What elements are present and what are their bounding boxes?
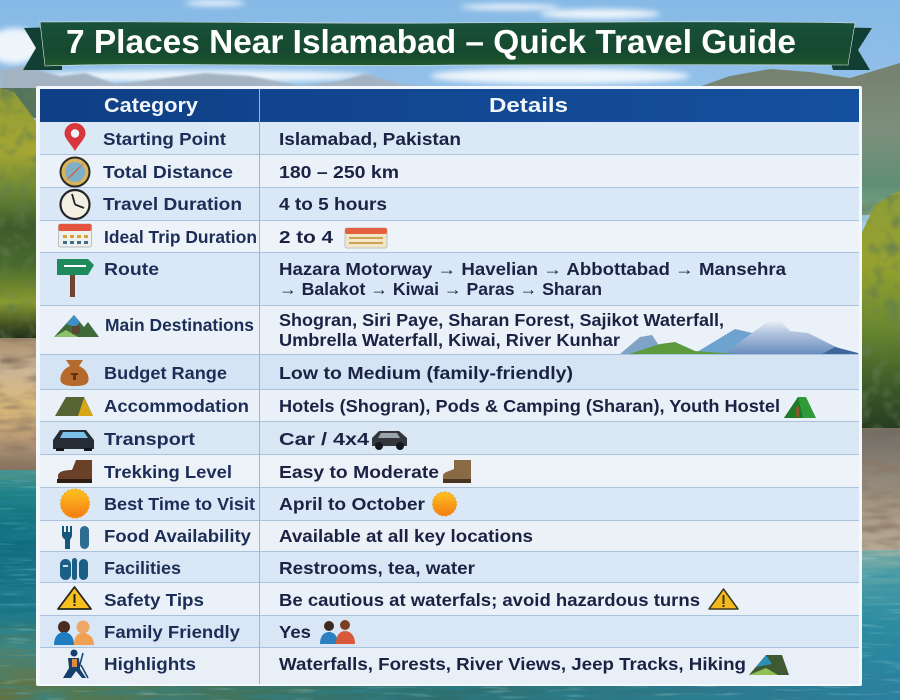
- row: family friendly: [54, 620, 355, 645]
- icon: boot: [57, 460, 92, 483]
- row: accommodation: [55, 396, 816, 418]
- row: budget range: Low to Medium (family-friendly): [279, 363, 573, 383]
- row: transport: Transport: [104, 429, 195, 449]
- row: transport: Car / 4x4: [279, 429, 369, 449]
- table header: Details: [489, 95, 568, 117]
- left trees: [0, 88, 38, 340]
- row: transport: [53, 429, 407, 451]
- row: main destinations: [54, 310, 858, 354]
- row: family friendly: Yes: [279, 622, 311, 642]
- row: budget range: [60, 360, 573, 386]
- icon: route signpost: [57, 259, 94, 297]
- destinations text: [279, 310, 724, 350]
- title: 7 Places Near Islamabad – Quick Travel Guide: [66, 23, 796, 60]
- right trees: [862, 190, 900, 435]
- icon: calendar: [58, 224, 92, 247]
- row: total distance: [60, 158, 399, 186]
- row: highlights: Highlights: [104, 654, 196, 674]
- row: highlights: Waterfalls, Forests, River Views, Jeep Tracks, Hiking: [279, 654, 746, 674]
- illustration: mountain panorama: [620, 318, 858, 354]
- row: accommodation: Accommodation: [104, 396, 249, 416]
- row: route: Route: [104, 259, 159, 279]
- row: food availability: Available at all key locations: [279, 526, 533, 546]
- icon: fork and knife: [62, 526, 89, 549]
- destinations text: Shogran, Siri Paye, Sharan Forest, Sajikot Waterfall,: [279, 310, 724, 330]
- row: budget range: Budget Range: [104, 363, 227, 383]
- row: route: [57, 259, 786, 299]
- icon: 4x4 vehicle: [372, 431, 407, 450]
- row: highlights: [63, 650, 789, 678]
- icon: small sun: [432, 492, 456, 516]
- title banner: [23, 22, 872, 70]
- row: facilities: Restrooms, tea, water: [279, 558, 475, 578]
- banner right ribbon tail: [820, 27, 872, 70]
- row: travel duration: 4 to 5 hours: [279, 194, 387, 214]
- row: safety tips: [58, 587, 738, 610]
- left rocks: [0, 338, 38, 473]
- icon: facilities symbols: [60, 558, 88, 580]
- icon: small calendar: [345, 228, 387, 248]
- row: food availability: [62, 526, 533, 549]
- icon: compass: [60, 158, 90, 186]
- table panel: [36, 86, 862, 686]
- icon: tent: [55, 397, 93, 416]
- row: best time to visit: April to October: [279, 494, 425, 514]
- row: total distance: 180 – 250 km: [279, 162, 399, 182]
- banner left ribbon tail: [23, 27, 62, 70]
- row: facilities: [60, 558, 475, 580]
- icon: green tent: [784, 397, 816, 418]
- banner body: [40, 22, 855, 66]
- icon: hiker: [63, 650, 88, 678]
- icon: mountain landscape: [54, 315, 99, 337]
- destinations text: Umbrella Waterfall, Kiwai, River Kunhar: [279, 330, 620, 350]
- icon: small boot: [443, 460, 471, 483]
- row: starting point: Starting Point: [103, 129, 226, 149]
- row: ideal trip duration: 2 to 4: [279, 227, 333, 247]
- icon: car: [53, 430, 94, 451]
- row: travel duration: Travel Duration: [103, 194, 242, 214]
- table header: Category: [104, 95, 199, 117]
- row: starting point: [64, 123, 461, 151]
- route details text: → Balakot → Kiwai → Paras → Sharan: [279, 279, 602, 299]
- row: accommodation: Hotels (Shogran), Pods & Camping (Sharan), Youth Hostel: [279, 396, 780, 416]
- row: starting point: Islamabad, Pakistan: [279, 129, 461, 149]
- icon: warning triangle: [58, 587, 91, 609]
- row: best time to visit: [60, 489, 456, 518]
- icon: clock: [60, 190, 90, 219]
- icon: small warning triangle: [709, 589, 738, 609]
- icon: small family: [320, 620, 355, 644]
- table header: [40, 89, 859, 122]
- row: ideal trip duration: [58, 224, 387, 248]
- row: total distance: Total Distance: [103, 162, 233, 182]
- icon: location pin: [64, 123, 86, 151]
- row: travel duration: [60, 190, 387, 219]
- row: trekking level: [57, 460, 471, 483]
- water: [0, 686, 900, 700]
- route details text: Hazara Motorway → Havelian → Abbottabad → Mansehra: [279, 259, 786, 279]
- row: safety tips: Safety Tips: [104, 590, 204, 610]
- row: trekking level: Trekking Level: [104, 462, 232, 482]
- row: best time to visit: Best Time to Visit: [104, 494, 255, 514]
- row: food availability: Food Availability: [104, 526, 251, 546]
- route details text: [279, 259, 786, 299]
- row: ideal trip duration: Ideal Trip Duration: [104, 227, 257, 247]
- row: facilities: Facilities: [104, 558, 181, 578]
- icon: hiking trail mountains: [749, 655, 789, 675]
- icon: money bag: [60, 360, 89, 386]
- row: safety tips: Be cautious at waterfals; avoid hazardous turns: [279, 590, 700, 610]
- row: trekking level: Easy to Moderate: [279, 462, 439, 482]
- icon: family: [54, 620, 94, 645]
- row: family friendly: Family Friendly: [104, 622, 240, 642]
- row: main destinations: Main Destinations: [105, 315, 254, 335]
- right rocks: [860, 428, 900, 550]
- icon: sun: [60, 489, 90, 518]
